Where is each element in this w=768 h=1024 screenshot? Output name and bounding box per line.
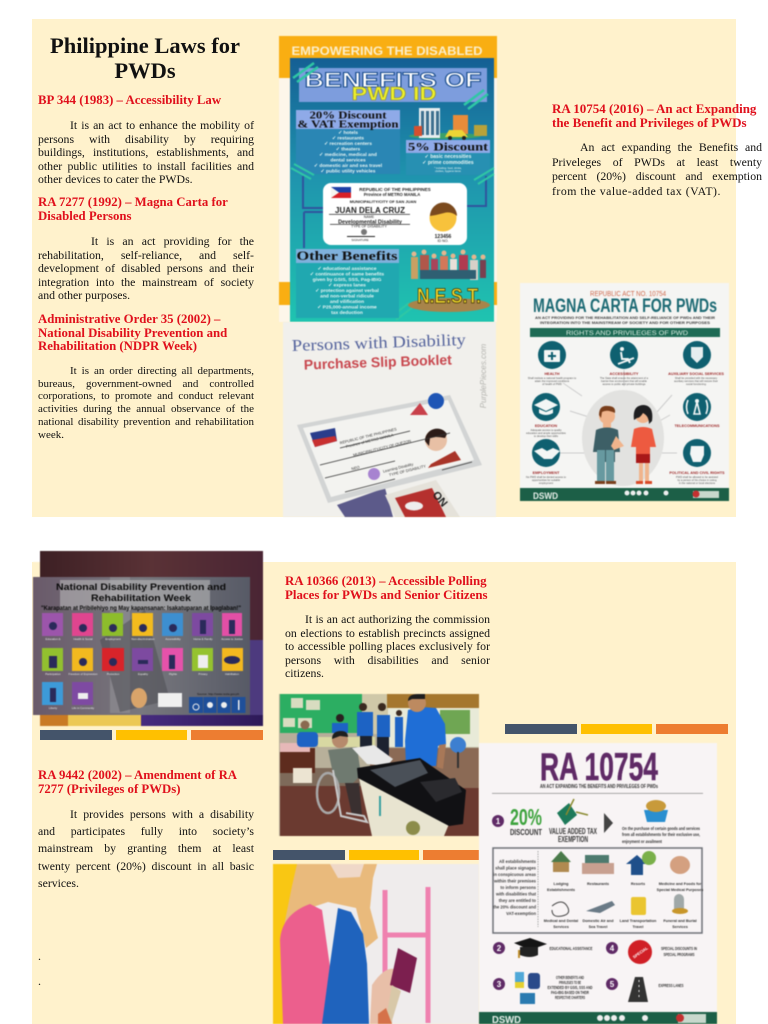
infographic: Magna Carta for PWDs: in the national or local elections xyxy=(679,481,716,485)
establishments box: Funeral and Burial xyxy=(663,919,697,923)
illustration: group of people xyxy=(411,250,486,280)
icon: hotel and shopping xyxy=(409,108,487,140)
text: Administrative Order description: bureaus, government-owned and controlled xyxy=(38,378,254,390)
establishments box: VAT-exemption xyxy=(506,911,536,916)
heading: RA 9442: 7277 (Privileges of PWDs) xyxy=(38,782,181,796)
heading: RA 10754 xyxy=(552,101,756,130)
text: BP 344 description: other public utilities to install facilities and xyxy=(38,159,254,173)
20% discount box: ✓ recreation centers xyxy=(324,141,372,147)
heading: Administrative Order 35: National Disability Prevention and xyxy=(38,326,227,340)
ID card sample: REPUBLIC OF THE PHILIPPINES xyxy=(359,187,431,192)
heading: RA 10366: Places for PWDs and Senior Citizens xyxy=(285,588,488,602)
logo: N.E.S.T.: N.E.S.T. xyxy=(417,285,481,308)
infographic: Magna Carta for PWDs: The State shall ensure the attainment of a xyxy=(600,376,649,380)
other benefits box: Other Benefits xyxy=(296,249,398,263)
items 2 to 5: SPECIAL DISCOUNTS IN xyxy=(661,946,697,951)
heading: RA 10754: RA 10754 (2016) – An act Expanding xyxy=(552,101,756,116)
labels: EDUCATION xyxy=(535,424,557,428)
5% discount box: 5% Discount xyxy=(408,140,488,154)
establishments box: the 20% discount and xyxy=(493,904,536,910)
item 1: discount row: enjoyment or availment xyxy=(622,839,662,844)
establishments box: Services xyxy=(553,925,569,929)
poster tile captions: Protection xyxy=(107,672,120,676)
ID card sample xyxy=(323,183,467,245)
photo: purchase slip booklet and ID card: ON xyxy=(430,489,450,510)
poster tiles xyxy=(42,613,243,705)
poster tile captions: Life in Community xyxy=(72,706,95,710)
gray poster xyxy=(33,577,250,715)
banner: rights and privileges: RIGHTS AND PRIVILEGES OF PWD xyxy=(566,330,688,337)
establishments box: with disabilities that xyxy=(495,892,537,896)
establishments box: to inform persons xyxy=(500,885,537,890)
establishments box: Establishments xyxy=(547,888,575,892)
infographic: Magna Carta for PWDs: PWD shall be allowed to be assisted xyxy=(676,475,719,479)
items 2 to 5: EXTENDED BY GSIS, SSS AND xyxy=(548,985,592,990)
ID card sample: MUNICIPALITY/CITY OF SAN JUAN xyxy=(350,199,416,204)
poster tile captions: Employment xyxy=(105,637,121,641)
photo: purchase slip booklet and ID card: Learning Disability xyxy=(383,462,414,474)
poster tile captions: Rights xyxy=(169,672,178,676)
5% discount box: ✓ prime commodities xyxy=(422,160,474,166)
text: BP 344 description: other devices to cater the PWDs. xyxy=(38,172,193,186)
text: RA 7277 description: It is an act providing for the xyxy=(91,234,254,248)
poster footer logos xyxy=(131,688,246,713)
text: Administrative Order description: It is an order directing all departments, xyxy=(70,365,254,377)
20% discount box: & VAT Exemption xyxy=(298,120,399,130)
item 1: discount row: 20% xyxy=(510,804,542,830)
other benefits box: and vilification xyxy=(330,299,364,305)
text: RA 7277 description: and other purposes. xyxy=(38,288,130,302)
ID card sample: SIGNATURE xyxy=(351,238,369,242)
heading: RA 7277 xyxy=(38,195,228,223)
establishments box: Restaurants xyxy=(587,882,609,886)
item 1: discount row: 1 xyxy=(496,817,501,826)
heading: BP 344: BP 344 (1983) – Accessibility Law xyxy=(38,93,221,107)
5% discount box: clothes, hygiene items xyxy=(435,169,462,173)
poster title: Rehabilitation Week xyxy=(91,593,192,604)
infographic: Magna Carta for PWDs: of health of PWD xyxy=(542,382,562,386)
heading: RA 9442 xyxy=(38,768,237,796)
text: RA 9442 description xyxy=(38,807,254,890)
ID card sample: JUAN DELA CRUZ xyxy=(335,206,405,215)
text: RA 9442 description: It provides persons with a disability xyxy=(70,807,254,821)
establishments box: Land Transportation xyxy=(620,919,657,923)
establishments box: Sea Travel xyxy=(589,925,607,929)
infographic: Magna Carta for PWDs: access to public and private buildings xyxy=(603,382,646,386)
infographic: RA 10754 xyxy=(478,742,718,1024)
items 2 to 5: 5 xyxy=(610,980,615,989)
stray dots: . xyxy=(38,949,41,963)
text: Administrative Order description: corporations, to promote and conduct relevant xyxy=(38,390,254,402)
panel: bottom cream background xyxy=(32,562,736,1024)
20% discount box: dental services xyxy=(330,158,366,164)
infographic: Magna Carta for PWDs: INTEGRATION INTO THE MAINSTREAM OF SOCIETY AND FOR OTHER PURPOSES xyxy=(540,321,711,325)
photo: purchase slip booklet and ID card: Purchase Slip Booklet xyxy=(304,351,452,373)
stray dots xyxy=(38,949,41,988)
labels xyxy=(533,372,725,475)
heading: Administrative Order 35: Administrative Order 35 (2002) – xyxy=(38,312,220,326)
infographic: Magna Carta for PWDs: Shall be provided with the necessary xyxy=(675,376,718,380)
vote counting machine xyxy=(357,758,466,836)
title box xyxy=(299,68,487,104)
item 1: discount row: EXEMPTION xyxy=(558,834,588,844)
heading: RA 7277: RA 7277 (1992) – Magna Carta for xyxy=(38,195,228,209)
text: RA 10754 description: An act expanding the Benefits and xyxy=(580,140,762,154)
photo: purchase slip booklet and ID card: NEO xyxy=(351,465,360,471)
items 2 to 5: 3 xyxy=(497,980,502,989)
establishments box: Resorts xyxy=(631,882,645,886)
infographic: Magna Carta for PWDs: opportunities for suitable xyxy=(532,478,561,482)
establishments box: within their premises xyxy=(493,878,537,884)
title xyxy=(50,33,240,83)
item 1: discount row: On the purchase of certain goods and services xyxy=(622,826,700,831)
poster tile captions: Habilitation xyxy=(225,672,239,676)
infographic: Magna Carta for PWDs: to develop their skills xyxy=(534,434,559,438)
labels: ACCESSIBILITY xyxy=(610,372,639,376)
photo: purchase slip booklet and ID card: PurplePieces.com xyxy=(479,343,488,408)
other benefits box: ✓ continuance of same benefits xyxy=(310,272,384,278)
poster tile captions: Home & Family xyxy=(193,637,213,641)
people in background xyxy=(297,703,403,747)
photo: purchase slip booklet and ID card: Province of METRO MANILA xyxy=(346,433,394,449)
poster tile captions: Freedom of Expression xyxy=(69,672,98,676)
title box: PWD ID xyxy=(352,84,436,104)
text: RA 10366 description: It is an act authorizing the commission xyxy=(305,612,490,626)
items 2 to 5: EDUCATIONAL ASSISTANCE xyxy=(550,946,593,951)
booklet bottom xyxy=(337,488,393,517)
other benefits box: given by GSIS, SSS, Pag-IBIG xyxy=(313,277,382,283)
other benefits box: and non-verbal ridicule xyxy=(320,294,374,300)
colour bars above RA 10754 xyxy=(505,724,728,734)
items 2 to 5: EXPRESS LANES xyxy=(658,983,684,988)
item 1: discount row: DISCOUNT xyxy=(510,827,543,837)
poster title xyxy=(41,582,241,612)
photo: purchase slip booklet and ID card: MUNICIPALITY/CITY OF QUEZON xyxy=(353,439,412,457)
big title: RA 10754 xyxy=(540,746,658,789)
text: RA 10754 description: percent (20%) discount and exemption xyxy=(552,169,762,183)
items 2 to 5 xyxy=(493,938,697,1004)
poster tile captions: Privacy xyxy=(198,672,208,676)
ID card sample: Developmental Disability xyxy=(338,220,402,226)
other benefits box: ✓ express lanes xyxy=(328,282,366,288)
infographic: Magna Carta for PWDs: by a person of his choice in voting xyxy=(677,478,717,482)
illustration: man and woman xyxy=(582,390,664,486)
photo: purchase slip booklet and ID card: TYPE OF DISABILITY xyxy=(389,464,427,477)
20% discount box: ✓ domestic air and sea travel xyxy=(314,163,383,169)
text: RA 7277 description: integration into the mainstream of society xyxy=(38,275,254,289)
poster tile captions: Equality xyxy=(138,672,149,676)
text: Administrative Order description: week. xyxy=(38,429,64,441)
establishments box: they are entitled to xyxy=(499,898,536,903)
poster tile captions: Participation xyxy=(45,672,61,676)
text: RA 10754 description: from the value-added tax (VAT). xyxy=(552,184,721,198)
establishments box: in conspicuous areas xyxy=(493,872,537,877)
items 2 to 5: SPECIAL PROGRAMS xyxy=(664,952,695,957)
photo: purchase slip booklet and ID card: Persons with Disability xyxy=(292,330,467,355)
text: RA 10366 description: to accessible polling places exclusively for xyxy=(285,639,490,653)
other benefits box: tax deduction xyxy=(331,310,363,316)
banner: rights and privileges xyxy=(530,328,720,337)
item 1: discount row xyxy=(492,799,700,844)
ID card xyxy=(297,395,482,503)
other benefits box xyxy=(296,249,399,318)
title: Philippine Laws for xyxy=(50,33,240,58)
5% discount box: ✓ basic necessities xyxy=(425,154,472,160)
20% discount box: 20% Discount xyxy=(310,110,387,122)
ID card sample: ID NO. xyxy=(438,239,448,243)
labels: POLITICAL AND CIVIL RIGHTS xyxy=(669,471,725,475)
text: Administrative Order description: activities during the annual observance of the xyxy=(38,403,254,415)
text: RA 9442 description: mainstream by granting them at least xyxy=(38,841,254,855)
stray dots: . xyxy=(38,974,41,988)
establishments box: Services xyxy=(672,925,688,929)
photo: purchase slip booklet and ID card xyxy=(282,321,496,518)
text: Administrative Order description: national disability prevention and rehabilitation xyxy=(38,416,254,428)
photo: girl painting letter H xyxy=(272,863,479,1024)
title box: BENEFITS OF xyxy=(304,69,482,92)
20% discount box: ✓ theaters xyxy=(336,146,361,152)
footer: DSWD: DSWD xyxy=(533,491,558,501)
items 2 to 5: SPECIAL xyxy=(632,945,649,959)
text: RA 9442 description: services. xyxy=(38,876,79,890)
5% discount box xyxy=(406,140,490,175)
heading: Administrative Order 35: Rehabilitation (NDPR Week) xyxy=(38,339,197,353)
text: RA 10754 description: Priveleges of PWDs at least twenty xyxy=(552,155,762,169)
text: RA 10366 description: on elections to establish precincts assigned xyxy=(285,626,490,640)
items 2 to 5: RESPECTIVE CHARTERS xyxy=(555,995,585,1000)
establishments box: Travel xyxy=(633,925,643,929)
infographic: Magna Carta for PWDs: Shall institute a national health program to xyxy=(528,376,577,380)
other benefits box: ✓ P25,000-annual income xyxy=(317,304,377,310)
footer: DSWD xyxy=(479,1012,717,1024)
infographic: Magna Carta for PWDs: No PWD shall be denied access to xyxy=(526,475,567,479)
photo: purchase slip booklet and ID card: REPUBLIC OF THE PHILIPPINES xyxy=(339,427,398,445)
text: RA 10754 description xyxy=(552,140,762,198)
items 2 to 5: 4 xyxy=(610,944,615,953)
20% discount box: ✓ hotels xyxy=(338,130,358,136)
labels: AUXILIARY SOCIAL SERVICES xyxy=(668,372,724,376)
infographic: Magna Carta for PWDs: attain the improved conditions xyxy=(535,379,570,383)
establishments box: Special Medical Purposes xyxy=(657,888,703,892)
labels: EMPLOYMENT xyxy=(533,471,560,475)
text: RA 7277 description xyxy=(38,234,254,302)
20% discount box: ✓ public utility vehicles xyxy=(321,168,376,174)
text: BP 344 description: persons with disability by requiring xyxy=(38,132,254,146)
infographic: Magna Carta for PWDs: social functioning xyxy=(686,382,707,386)
establishments box: All establishments xyxy=(499,859,537,864)
text: RA 10366 description xyxy=(285,612,490,680)
heading: RA 9442: RA 9442 (2002) – Amendment of RA xyxy=(38,768,237,782)
item 1: discount row: VALUE ADDED TAX xyxy=(549,826,597,836)
panel: top cream background xyxy=(32,19,736,517)
other benefits box: ✓ protection against verbal xyxy=(315,288,379,294)
heading: RA 10754: the Benefit and Privileges of PWDs xyxy=(552,115,747,130)
photo: NDPR week poster on dark background xyxy=(32,550,264,727)
labels: HEALTH xyxy=(544,372,560,376)
labels: TELECOMMUNICATIONS xyxy=(674,424,720,428)
20% discount box: ✓ restaurants xyxy=(332,136,364,142)
text: RA 7277 description: rehabilitation, self-reliance, and self- xyxy=(38,248,254,262)
5% discount box: * including: food, drinks, xyxy=(434,166,462,170)
infographic: Magna Carta for PWDs: AN ACT PROVIDING FOR THE REHABILITATION AND SELF-RELIANCE OF PWDs AND THEIR xyxy=(535,316,716,320)
establishments box: Medical and Dental xyxy=(544,919,578,923)
infographic: Magna Carta for PWDs: Adequate access to quality xyxy=(530,428,562,432)
infographic: Magna Carta for PWDs: employment xyxy=(539,481,553,485)
heading: RA 10366: RA 10366 (2013) – Accessible Polling xyxy=(285,574,487,588)
poster tile captions: Accessibility xyxy=(165,637,181,641)
establishments box: Lodging xyxy=(554,882,569,886)
poster tile captions xyxy=(45,637,243,710)
ID card sample: TYPE OF DISABILITY xyxy=(351,224,387,228)
infographic: Magna Carta for PWDs: education and ample opportunities xyxy=(526,431,567,435)
text: Administrative Order description xyxy=(38,365,254,441)
footer: DSWD xyxy=(520,488,729,501)
items 2 to 5: 2 xyxy=(497,944,502,953)
20% discount box xyxy=(296,110,400,174)
banner text: EMPOWERING THE DISABLED xyxy=(292,46,482,58)
infographic: Magna Carta for PWDs xyxy=(519,282,730,502)
other benefits box: ✓ educational assistance xyxy=(317,266,377,272)
establishments box: Domestic Air and xyxy=(582,919,614,923)
20% discount box: ✓ medicine, medical and xyxy=(319,152,377,158)
poster footer logos: Source: http://www.ncda.gov.ph xyxy=(197,692,239,696)
man in blue shirt xyxy=(405,694,446,769)
title: PWDs xyxy=(114,58,176,83)
infographic: Magna Carta for PWDs: barrier-free environment that will enable xyxy=(601,379,647,383)
poster title: National Disability Prevention and xyxy=(56,582,226,593)
heading: RA 7277: Disabled Persons xyxy=(38,209,132,223)
text: RA 9442 description: twenty percent (20%) discount in all basic xyxy=(38,859,254,873)
text: RA 10366 description: persons with disabilities and senior xyxy=(285,653,490,667)
establishments box: Medicine and Foods for xyxy=(659,882,702,886)
items 2 to 5: PAG-IBIG BASED ON THEIR xyxy=(551,990,589,995)
poster tile captions: Education & xyxy=(45,637,61,641)
text: BP 344 description: It is an act to enhance the mobility of xyxy=(70,118,254,132)
poster tile captions: Access to Justice xyxy=(221,637,243,641)
colour bars under NDPR poster xyxy=(40,730,263,740)
ID card sample: NAME xyxy=(364,215,375,219)
establishments box xyxy=(493,848,703,933)
ID card sample: Province of METRO MANILA xyxy=(364,192,420,197)
desks xyxy=(280,748,315,773)
text: RA 10366 description: citizens. xyxy=(285,666,324,680)
infographic: Magna Carta for PWDs: auxiliary services that will restore their xyxy=(674,379,718,383)
text: RA 9442 description: and participates fully into society’s xyxy=(38,824,254,838)
text: RA 7277 description: development of disabled persons and their xyxy=(38,261,254,275)
heading: Administrative Order 35 xyxy=(38,312,228,353)
colour bars above girl photo xyxy=(273,850,479,860)
poster tile captions: Liberty xyxy=(49,706,58,710)
text: BP 344 description: buildings, institutions, establishments, and xyxy=(38,145,254,159)
infographic: RA 10754: AN ACT EXPANDING THE BENEFITS AND PRIVILEGES OF PWDs xyxy=(540,784,658,790)
heading: RA 10366 xyxy=(285,574,488,602)
establishments box: shall place signages xyxy=(495,866,537,870)
poster tile captions: Non-discrimination xyxy=(131,637,155,641)
ID card sample: 123456 xyxy=(435,234,452,240)
items 2 to 5: OTHER BENEFITS AND xyxy=(556,975,584,980)
infographic: Benefits of PWD ID xyxy=(278,35,498,322)
infographic: Magna Carta for PWDs: REPUBLIC ACT NO. 10754 xyxy=(590,289,666,298)
poster title: "Karapatan at Pribilehiyo ng May kapansanan: Isakatuparan at Ipaglaban!" xyxy=(41,606,241,612)
photo: wheelchair voter at polling machine xyxy=(278,693,480,837)
items 2 to 5: PRIVILEGES TO BE xyxy=(559,980,581,985)
item 1: discount row: from all establishments for their exclusive use, xyxy=(622,832,700,837)
poster tile captions: Health & Social xyxy=(73,637,93,641)
text: BP 344 description xyxy=(38,118,254,186)
voter in wheelchair xyxy=(317,731,393,822)
